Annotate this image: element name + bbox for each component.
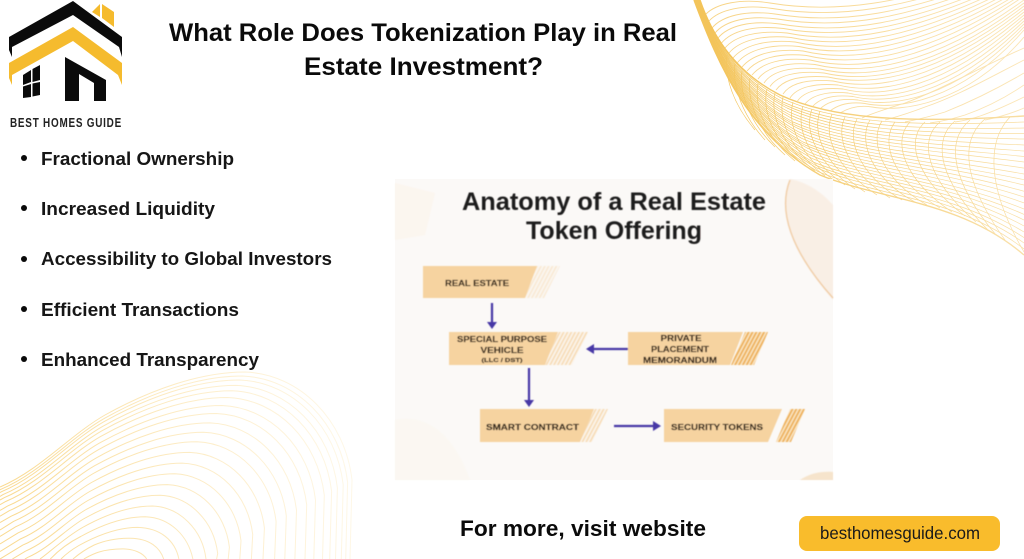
box: private placement memorandum: PLACEMENT bbox=[651, 344, 710, 354]
box: special purpose vehicle: (LLC / DST) bbox=[482, 358, 523, 364]
bullet: Accessibility to Global Investors: Accessibility to Global Investors bbox=[41, 248, 332, 269]
box: smart contract bbox=[480, 409, 608, 442]
decorative wave: top right mesh bbox=[694, 0, 1024, 255]
box: private placement memorandum bbox=[628, 332, 768, 365]
box: special purpose vehicle: VEHICLE bbox=[480, 345, 524, 355]
logo black roof bbox=[9, 1, 122, 57]
box: special purpose vehicle bbox=[449, 332, 588, 365]
title: Estate Investment? bbox=[304, 53, 543, 81]
panel heading bbox=[462, 188, 766, 245]
logo window bbox=[23, 65, 40, 98]
website button: besthomesguide.com bbox=[820, 523, 980, 543]
box: private placement memorandum: MEMORANDUM bbox=[643, 355, 717, 365]
box: smart contract: SMART CONTRACT bbox=[486, 422, 580, 432]
bullet: Increased Liquidity: Increased Liquidity bbox=[41, 198, 216, 219]
logo wordmark: BEST HOMES GUIDE bbox=[10, 115, 122, 130]
call to action text: For more, visit website bbox=[460, 516, 706, 541]
panel heading: Token Offering bbox=[526, 217, 702, 245]
panel: anatomy of a real estate token offering bbox=[395, 179, 833, 480]
bullet: Enhanced Transparency: Enhanced Transparency bbox=[41, 349, 260, 370]
arrow: smart contract to security tokens bbox=[614, 421, 661, 431]
box: security tokens: SECURITY TOKENS bbox=[671, 422, 763, 432]
box: private placement memorandum: PRIVATE bbox=[660, 333, 702, 343]
decorative wave: bottom left contour lines bbox=[0, 372, 352, 559]
arrow: private placement memorandum to SPV bbox=[586, 344, 628, 354]
title: What Role Does Tokenization Play in Real bbox=[169, 19, 677, 47]
website button bbox=[799, 516, 1000, 551]
box: security tokens bbox=[664, 409, 805, 442]
panel heading: Anatomy of a Real Estate bbox=[462, 188, 766, 216]
box: real estate bbox=[423, 266, 560, 298]
arrow: SPV to smart contract bbox=[524, 368, 534, 407]
logo door bbox=[65, 57, 106, 101]
bullet: Efficient Transactions: Efficient Transactions bbox=[41, 299, 239, 320]
logo yellow roof bbox=[9, 27, 122, 85]
logo: Best Homes Guide bbox=[9, 1, 122, 130]
bullet list bbox=[21, 148, 332, 370]
logo chimney bbox=[92, 4, 114, 27]
bullet: Fractional Ownership: Fractional Ownership bbox=[41, 148, 234, 169]
arrow: real estate to SPV bbox=[487, 303, 497, 329]
box: special purpose vehicle: SPECIAL PURPOSE bbox=[457, 334, 547, 344]
panel decorative swirls bbox=[395, 179, 833, 480]
title bbox=[169, 19, 677, 81]
box: real estate: REAL ESTATE bbox=[445, 278, 509, 288]
